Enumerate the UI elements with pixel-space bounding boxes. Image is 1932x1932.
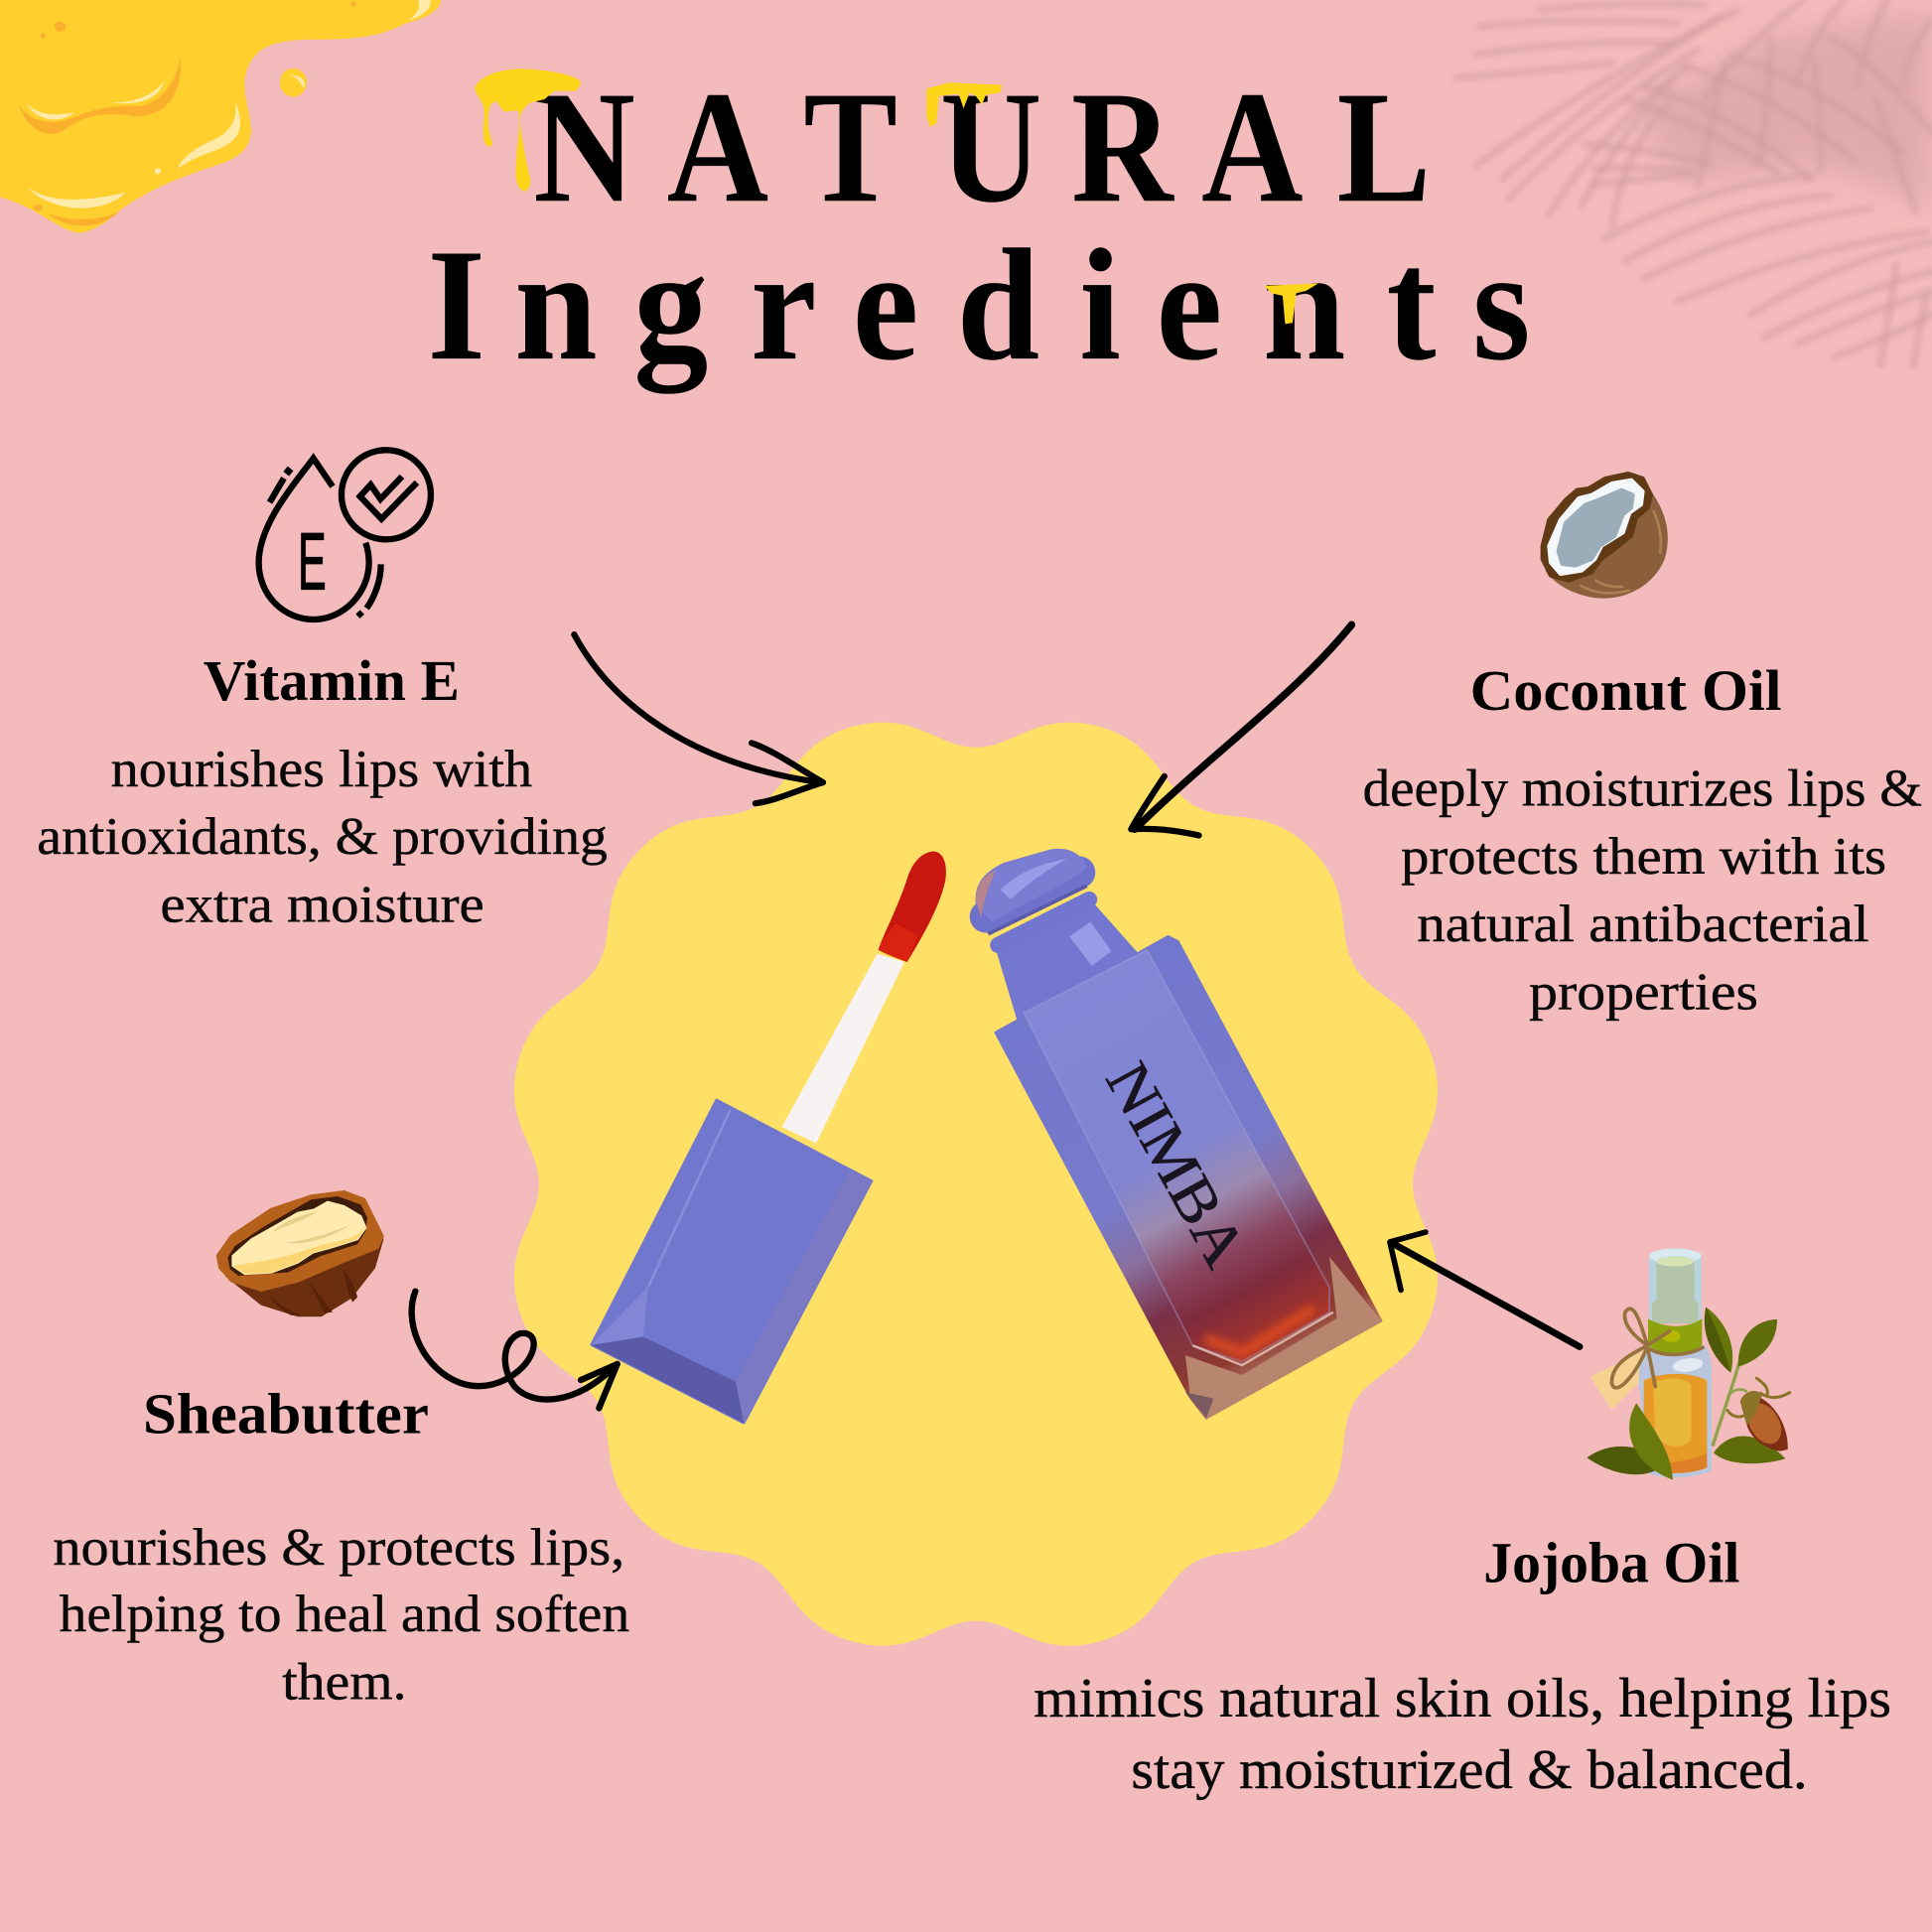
neck highlight bbox=[1069, 921, 1111, 966]
description: sheabutter: nourishes & protects lips, bbox=[53, 1517, 624, 1577]
upper collar bbox=[986, 873, 1079, 916]
yellow scalloped blob bbox=[516, 724, 1436, 1644]
twine bow bbox=[1611, 1309, 1703, 1388]
title bbox=[428, 59, 1531, 394]
bottle rim bbox=[976, 849, 1087, 921]
icon: jojoba oil bottle bbox=[1587, 1248, 1790, 1480]
leaves and stem bbox=[1713, 1363, 1739, 1447]
bottle brand name: NIMBA bbox=[1092, 1051, 1259, 1279]
bottle glass bbox=[1639, 1345, 1712, 1477]
description: vitamin E bbox=[37, 739, 608, 933]
arrow: jojoba oil to product bbox=[1390, 1232, 1580, 1346]
honey drips on title bbox=[475, 69, 1318, 324]
white stem bbox=[782, 954, 904, 1143]
bottle label panel bbox=[1024, 950, 1329, 1361]
text block: vitamin E bbox=[37, 648, 608, 933]
bottle neck bbox=[996, 899, 1140, 1023]
palm leaf shadow bbox=[1456, 0, 1932, 367]
icon: shea butter nut bbox=[217, 1192, 382, 1315]
heading: coconut oil: Coconut Oil bbox=[1470, 658, 1782, 723]
description: jojoba oil: stay moisturized & balanced. bbox=[1131, 1739, 1808, 1801]
icon: coconut bbox=[1542, 474, 1668, 599]
text block: coconut oil bbox=[1363, 658, 1922, 1021]
spray cap bbox=[1649, 1248, 1702, 1320]
product: lip gloss applicator and bottle bbox=[592, 849, 1381, 1423]
description: vitamin E: extra moisture bbox=[160, 874, 484, 933]
description: sheabutter: helping to heal and soften bbox=[60, 1584, 629, 1643]
description: coconut oil: natural antibacterial bbox=[1417, 894, 1869, 953]
glass bottle bbox=[976, 849, 1381, 1418]
description: coconut oil: protects them with its bbox=[1401, 826, 1886, 886]
description: sheabutter: them. bbox=[282, 1651, 407, 1711]
honey droplet bbox=[280, 69, 307, 96]
description: jojoba oil: mimics natural skin oils, helping lips bbox=[1034, 1668, 1891, 1729]
applicator wand and cap bbox=[592, 852, 946, 1423]
green collar bbox=[1648, 1318, 1702, 1354]
red tip bbox=[879, 852, 946, 962]
jojoba seed bbox=[1745, 1393, 1788, 1451]
glass edge bbox=[1192, 1312, 1333, 1365]
lower collar bbox=[998, 899, 1089, 945]
liquid glow bbox=[1205, 1309, 1313, 1353]
purple cap bbox=[592, 1100, 872, 1423]
description: coconut oil: deeply moisturizes lips & bbox=[1363, 759, 1922, 818]
icon: vitamin E drop with check bbox=[259, 450, 431, 620]
description: vitamin E: antioxidants, & providing bbox=[37, 806, 608, 866]
yellow honey splash bbox=[0, 0, 441, 233]
glass base bbox=[1185, 1257, 1381, 1418]
arrow: coconut oil to product bbox=[1131, 624, 1351, 835]
arrow: vitamin E to product bbox=[574, 634, 823, 803]
description: jojoba oil bbox=[1034, 1668, 1891, 1801]
bottle body bbox=[996, 936, 1381, 1418]
description: coconut oil bbox=[1363, 759, 1922, 1021]
tag bbox=[1590, 1350, 1645, 1410]
description: vitamin E: nourishes lips with bbox=[111, 739, 532, 798]
heading: sheabutter: Sheabutter bbox=[143, 1381, 429, 1446]
text block: jojoba oil bbox=[1034, 1531, 1891, 1801]
title line 2: Ingredients bbox=[428, 215, 1531, 394]
title line 1: NATURAL bbox=[533, 59, 1431, 235]
description: coconut oil: properties bbox=[1529, 961, 1758, 1021]
oil bbox=[1644, 1374, 1707, 1473]
collar groove bbox=[988, 886, 1087, 934]
heading: jojoba oil: Jojoba Oil bbox=[1483, 1531, 1739, 1595]
description: sheabutter bbox=[53, 1517, 629, 1711]
arrow: sheabutter to product bbox=[412, 1292, 618, 1408]
heading: vitamin E: Vitamin E bbox=[204, 648, 460, 713]
honey highlights bbox=[19, 0, 431, 225]
text block: sheabutter bbox=[53, 1381, 629, 1711]
icon: vitamin E drop with check: E bbox=[298, 516, 327, 607]
